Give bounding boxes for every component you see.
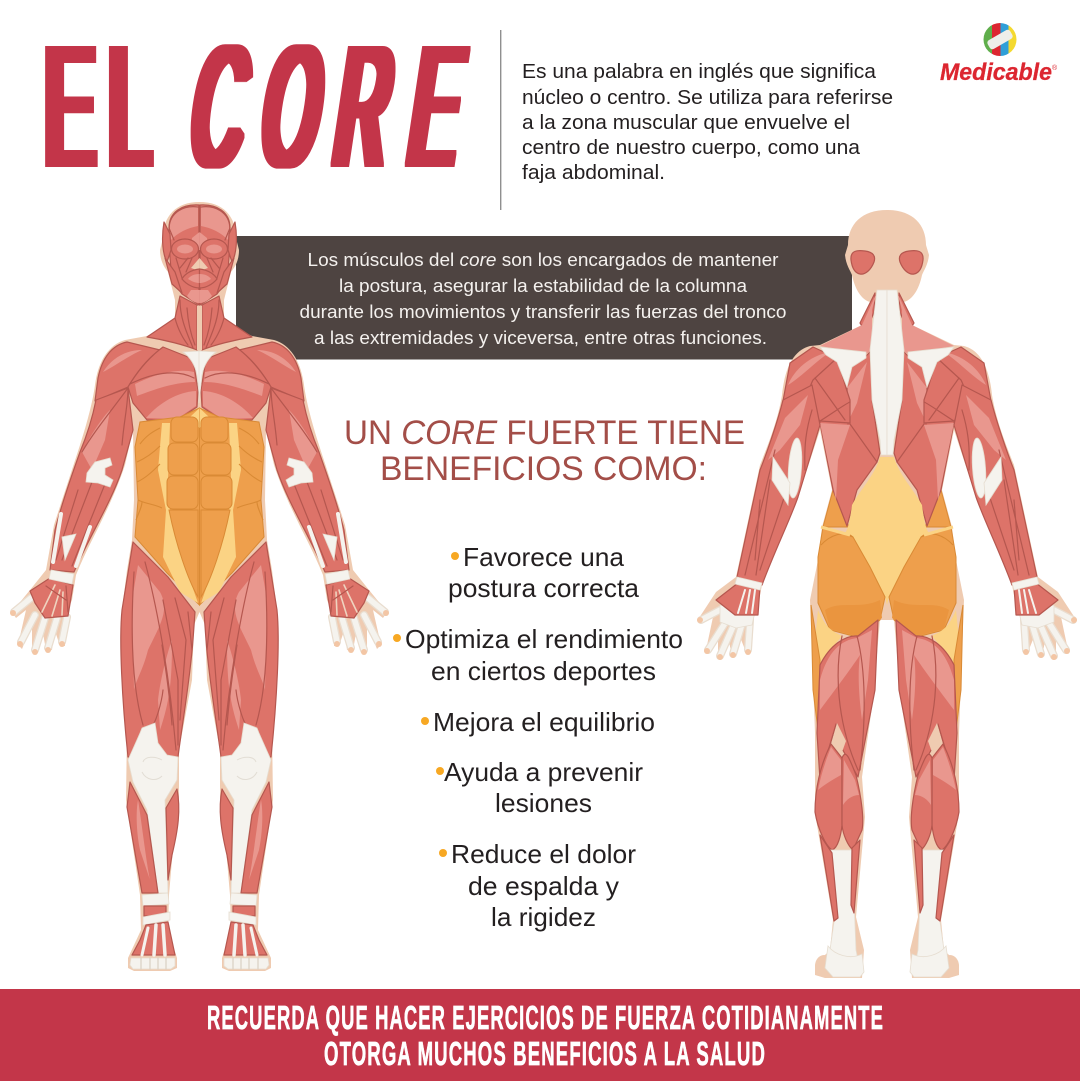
benefit: lesiones: lesiones bbox=[495, 788, 592, 818]
logo: Medicable: Medicable bbox=[940, 59, 1052, 86]
neck and trapezius bbox=[147, 296, 197, 350]
intro paragraph: centro de nuestro cuerpo, como una bbox=[522, 136, 861, 159]
pectoral bbox=[128, 347, 198, 420]
back muscular figure bbox=[697, 210, 1077, 978]
rotator cuff bbox=[809, 358, 850, 423]
front muscular figure bbox=[10, 202, 389, 971]
benefit: rendimiento bbox=[393, 624, 683, 686]
divider line bbox=[500, 30, 501, 210]
benefit: postura: postura correcta bbox=[448, 573, 640, 603]
heading: benefits bbox=[344, 414, 745, 488]
neck muscle bbox=[860, 293, 875, 332]
benefit: dolor: de espalda y bbox=[468, 871, 619, 901]
achilles tendon bbox=[830, 850, 858, 960]
benefit: rendimiento: en ciertos deportes bbox=[431, 656, 656, 686]
heading: benefits: UN CORE FUERTE TIENE bbox=[344, 414, 745, 452]
dark panel: core muscle function: a las extremidades y viceversa, entre otras funciones. bbox=[314, 327, 767, 348]
heel bbox=[815, 946, 864, 977]
arm muscles bbox=[50, 388, 133, 572]
footer banner bbox=[0, 989, 1080, 1081]
benefit: lesiones bbox=[436, 757, 643, 818]
scapular spine tendon bbox=[820, 347, 866, 387]
title: EL CORE: EL bbox=[45, 11, 150, 201]
intro paragraph: faja abdominal. bbox=[522, 161, 665, 184]
wrist band bbox=[49, 570, 74, 584]
intro paragraph: a la zona muscular que envuelve el bbox=[522, 111, 850, 134]
hand bbox=[30, 578, 73, 618]
iliotibial band bbox=[813, 610, 842, 700]
dark panel: core muscle function bbox=[236, 236, 852, 360]
palm bbox=[720, 605, 755, 628]
lumbar fascia bbox=[845, 457, 887, 605]
forearm tendons bbox=[53, 514, 90, 566]
gluteus bbox=[818, 527, 885, 637]
wrist band bbox=[735, 577, 762, 590]
thigh bbox=[121, 542, 195, 757]
spine aponeurosis bbox=[870, 290, 887, 455]
title: EL CORE bbox=[45, 11, 475, 201]
benefit: rendimiento: Optimiza el rendimiento bbox=[405, 624, 683, 654]
hamstrings bbox=[817, 620, 878, 780]
intro paragraph: núcleo o centro. Se utiliza para referirse bbox=[522, 86, 893, 109]
logo: Medicable: ® bbox=[1052, 64, 1058, 72]
lower leg muscles bbox=[127, 782, 158, 893]
benefit: dolor: Reduce el dolor bbox=[451, 839, 636, 869]
face muscles bbox=[163, 205, 200, 305]
orange waist bbox=[823, 490, 849, 527]
ear muscle bbox=[851, 251, 875, 274]
dark panel: core muscle function: Los músculos del core son los encargados de mantener bbox=[308, 249, 778, 270]
fingers bbox=[701, 610, 750, 656]
sternum bbox=[183, 351, 200, 403]
intro paragraph bbox=[522, 60, 893, 184]
deltoid bbox=[783, 347, 837, 401]
elbow tendon bbox=[86, 458, 113, 487]
abdominal wall bbox=[135, 408, 200, 605]
silhouette bbox=[699, 210, 887, 978]
trapezius lower highlight bbox=[847, 362, 867, 424]
latissimus highlight bbox=[820, 423, 850, 500]
benefits list bbox=[393, 542, 683, 932]
dark panel: core muscle function: la postura, asegurar la estabilidad de la columna bbox=[339, 275, 748, 296]
knee and shin tendon bbox=[128, 723, 178, 893]
benefit: equilibrio: Mejora el equilibrio bbox=[433, 707, 655, 737]
benefit: postura bbox=[448, 542, 640, 603]
deltoid bbox=[95, 342, 160, 401]
popliteal diamond bbox=[831, 723, 846, 755]
elbow tendon bbox=[786, 438, 804, 498]
logo: Medicable bbox=[940, 23, 1058, 86]
silhouette bbox=[12, 202, 200, 971]
arm muscles bbox=[737, 385, 820, 585]
title: EL CORE: CORE bbox=[181, 11, 475, 201]
heading: benefits: BENEFICIOS COMO: bbox=[380, 450, 707, 488]
dark panel: core muscle function: durante los movimientos y transferir las fuerzas del tronco bbox=[300, 301, 786, 322]
benefit: lesiones: Ayuda a prevenir bbox=[444, 757, 643, 787]
trapezius upper bbox=[820, 292, 877, 354]
benefit: dolor bbox=[439, 839, 636, 932]
foot bbox=[130, 922, 175, 969]
benefit: postura: Favorece una bbox=[463, 542, 625, 572]
benefit: dolor: la rigidez bbox=[491, 902, 596, 932]
logo icon: striped circle with bandage bbox=[983, 23, 1018, 57]
hand muscles bbox=[716, 583, 760, 615]
intro paragraph: Es una palabra en inglés que significa bbox=[522, 60, 877, 83]
calves bbox=[815, 744, 842, 850]
back muscle mass bbox=[813, 350, 880, 526]
fingers bbox=[14, 598, 67, 650]
ankle tendons bbox=[142, 893, 170, 925]
